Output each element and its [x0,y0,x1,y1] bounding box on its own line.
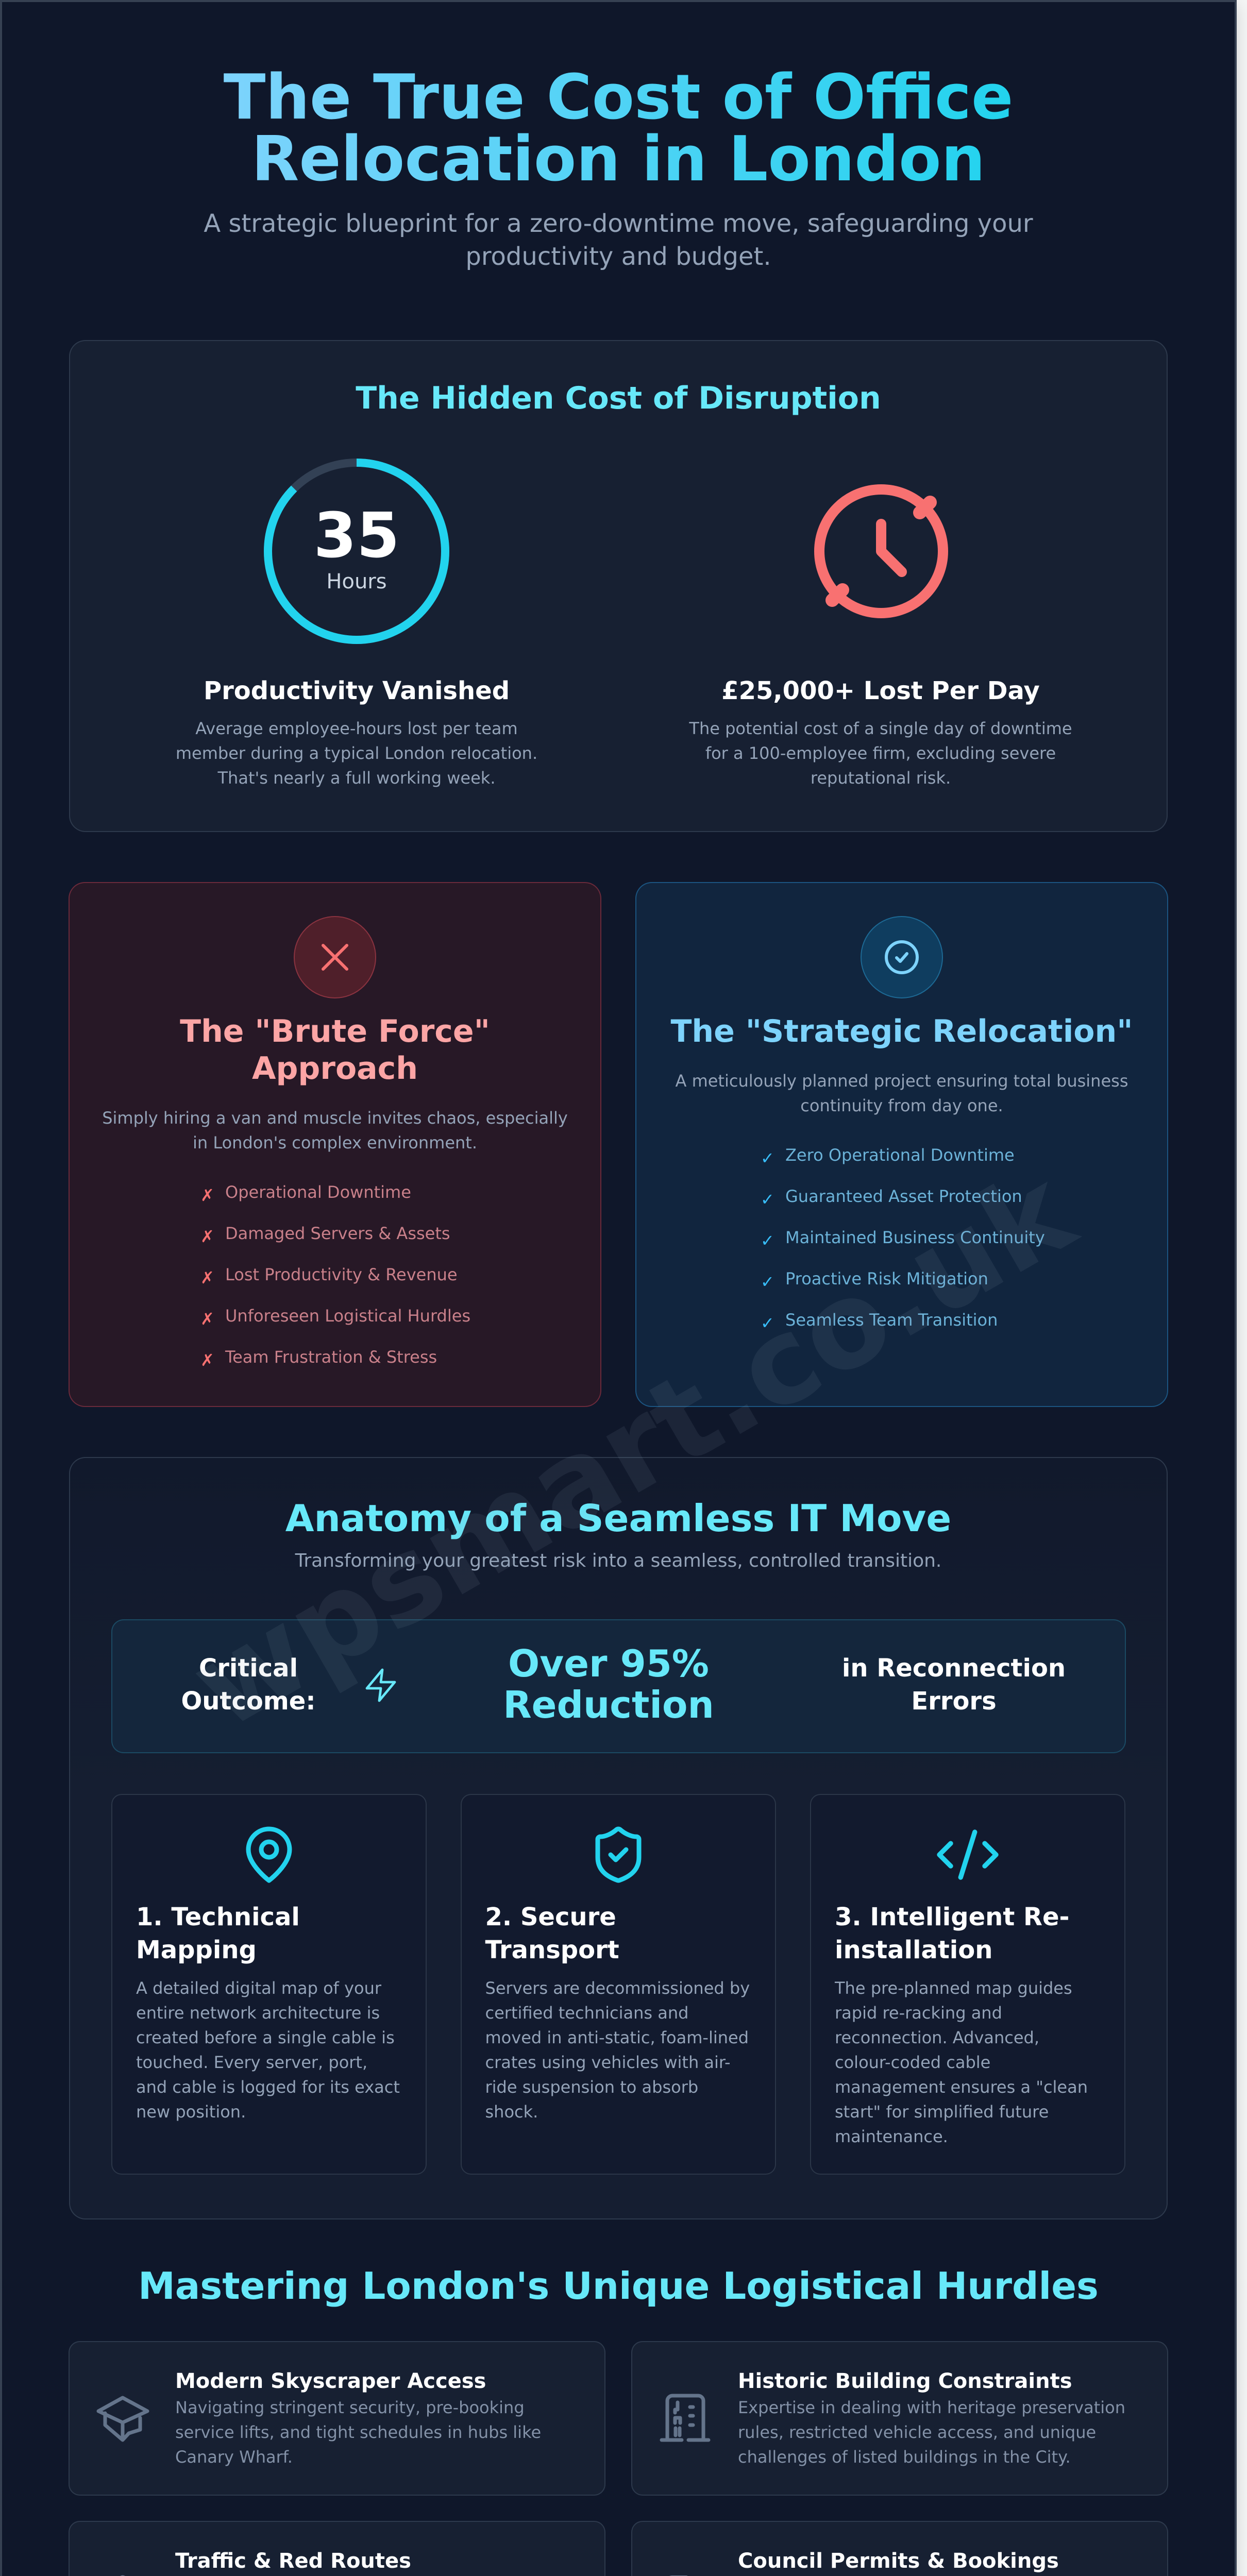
callout: critical outcome [111,1619,1126,1753]
list: strategic outcomes: Zero Operational Downtime [785,1145,1015,1165]
icon: map pin [246,1827,292,1883]
card: council permits: Council Permits & Bookings [738,2549,1059,2573]
card: intelligent re-installation: reconnection. Advanced, [835,2028,1039,2047]
callout result: Errors [911,1687,997,1716]
card: traffic and red routes: Traffic & Red Routes [175,2549,411,2573]
chart: 35 hours ring: Hours [326,570,387,594]
card: technical mapping: A detailed digital map of your [136,1978,381,1998]
icon: building [660,2394,710,2442]
description: brute force: in London's complex environment. [193,1133,477,1153]
panel: hidden cost of disruption [69,340,1168,832]
card: technical mapping: Mapping [136,1936,257,1964]
card: technical mapping [111,1794,427,2175]
list: strategic outcomes: ✓ [761,1272,774,1292]
card: historic buildings: challenges of listed buildings in the City. [738,2447,1071,2467]
stat text: productivity vanished: Average employee-hours lost per team [195,719,518,738]
chart: 35 hours ring: 35 [313,500,400,572]
icon: warning triangle [121,2575,125,2576]
subtitle: productivity and budget. [465,242,771,271]
card: intelligent re-installation: colour-coded cable [835,2053,990,2072]
card: technical mapping: new position. [136,2102,246,2122]
callout result [842,1654,1066,1716]
card: skyscraper access: Navigating stringent security, pre-booking [175,2398,525,2417]
stat text: productivity vanished: member during a typical London relocation. [176,743,537,763]
list: strategic outcomes: ✓ [761,1231,774,1250]
list: brute force outcomes: ✗ [200,1185,214,1205]
description: brute force [102,1108,568,1153]
callout label: Outcome: [181,1687,316,1716]
icon: clock [814,484,948,618]
chart: 35 hours ring [264,459,449,644]
card: historic buildings: Historic Building Constraints [738,2369,1072,2393]
icon: cross [294,916,376,998]
card: secure transport: certified technicians and [485,2003,688,2023]
heading: hidden cost: The Hidden Cost of Disruption [356,380,881,416]
card: council permits [631,2521,1168,2576]
list: brute force outcomes: Damaged Servers & Assets [225,1224,450,1243]
callout label [181,1654,316,1716]
stat text: lost per day: The potential cost of a single day of downtime [689,719,1072,738]
list: brute force outcomes: ✗ [200,1227,214,1246]
stat text: lost per day: for a 100-employee firm, excluding severe [705,743,1056,763]
list: strategic outcomes: ✓ [761,1190,774,1209]
card: technical mapping: touched. Every server, port, [136,2053,367,2072]
title [224,62,1013,195]
list: brute force outcomes: Operational Downtime [225,1182,411,1202]
title: The True Cost of Office [224,62,1013,133]
callout result: in Reconnection [842,1654,1066,1683]
card: skyscraper access: Canary Wharf. [175,2447,293,2467]
heading: brute force: The "Brute Force" [180,1013,490,1049]
icon: code [937,1829,999,1880]
heading: strategic relocation: The "Strategic Relocation" [671,1013,1133,1049]
list: brute force outcomes: ✗ [200,1268,214,1287]
list: strategic outcomes: ✓ [761,1313,774,1333]
list: strategic outcomes: Proactive Risk Mitigation [785,1269,988,1289]
card: skyscraper access: service lifts, and tight schedules in hubs like [175,2422,541,2442]
subheading: anatomy: Transforming your greatest risk into a seamless, controlled transition. [295,1550,941,1571]
list: brute force outcomes: Team Frustration & Stress [225,1347,437,1367]
card: intelligent re-installation: rapid re-racking and [835,2003,1002,2023]
list: strategic outcomes: Seamless Team Transition [785,1310,998,1330]
card: intelligent re-installation [810,1794,1125,2175]
stat title: lost per day: £25,000+ Lost Per Day [721,676,1040,705]
stat text: productivity vanished [176,719,537,788]
card: secure transport: shock. [485,2102,538,2122]
icon: shield check [596,1827,641,1883]
card: historic buildings [631,2341,1168,2496]
description: strategic relocation: continuity from day one. [800,1096,1003,1115]
card: technical mapping: 1. Technical [136,1903,300,1931]
watermark: wpsmart.co.uk [170,1143,1094,1756]
card: technical mapping: entire network architecture is [136,2003,380,2023]
callout figure [503,1642,714,1726]
panel: strategic relocation [635,882,1168,1407]
heading: brute force [180,1013,490,1087]
panel: anatomy of a seamless IT move [69,1457,1168,2219]
list: strategic outcomes: ✓ [761,1148,774,1168]
card: secure transport: ride suspension to absorb [485,2077,698,2097]
description: brute force: Simply hiring a van and muscle invites chaos, especially [102,1108,568,1128]
list: brute force outcomes [200,1182,470,1370]
card: secure transport [461,1794,776,2175]
list: brute force outcomes: ✗ [200,1350,214,1370]
list: brute force outcomes: Unforeseen Logistical Hurdles [225,1306,470,1326]
icon: box [97,2396,149,2442]
card: secure transport: Transport [485,1936,619,1964]
heading: brute force: Approach [252,1050,418,1087]
title: Relocation in London [251,124,985,195]
stat text: productivity vanished: That's nearly a full working week. [217,768,495,788]
list: strategic outcomes: Maintained Business Continuity [785,1228,1045,1247]
card: skyscraper access [69,2341,605,2496]
card: secure transport: crates using vehicles with air- [485,2053,731,2072]
list: strategic outcomes [761,1145,1045,1333]
card: skyscraper access: Modern Skyscraper Access [175,2369,486,2393]
description: strategic relocation [675,1071,1128,1115]
icon: lightning bolt [366,1668,396,1702]
card: secure transport: moved in anti-static, foam-lined [485,2028,749,2047]
card: technical mapping: created before a single cable is [136,2028,395,2047]
card: secure transport: Servers are decommissioned by [485,1978,750,1998]
stat text: lost per day: reputational risk. [811,768,951,788]
card: intelligent re-installation: 3. Intelligent Re- [835,1903,1069,1931]
list: brute force outcomes: ✗ [200,1309,214,1329]
card: secure transport: 2. Secure [485,1903,616,1931]
callout figure: Over 95% [508,1642,709,1685]
card: traffic and red routes [69,2521,605,2576]
card: intelligent re-installation: start" for simplified future [835,2102,1049,2122]
list: brute force outcomes: Lost Productivity & Revenue [225,1265,458,1284]
stat text: lost per day [689,719,1072,788]
card: historic buildings: Expertise in dealing with heritage preservation [738,2398,1125,2417]
card: intelligent re-installation: installation [835,1936,992,1964]
callout figure: Reduction [503,1683,714,1726]
icon: check circle [861,916,943,998]
description: strategic relocation: A meticulously planned project ensuring total business [675,1071,1128,1091]
subtitle: A strategic blueprint for a zero-downtime move, safeguarding your [204,209,1033,238]
panel: brute force approach [69,882,601,1407]
card: historic buildings: rules, restricted vehicle access, and unique [738,2422,1096,2442]
card: intelligent re-installation: management ensures a "clean [835,2077,1088,2097]
heading: anatomy: Anatomy of a Seamless IT Move [285,1497,951,1540]
card: technical mapping: and cable is logged for its exact [136,2077,400,2097]
stat title: productivity vanished: Productivity Vanished [204,676,510,705]
subtitle [204,209,1033,271]
list: strategic outcomes: Guaranteed Asset Protection [785,1187,1022,1206]
heading: logistical hurdles: Mastering London's Unique Logistical Hurdles [138,2264,1099,2308]
card: intelligent re-installation: The pre-planned map guides [835,1978,1072,1998]
callout label: Critical [199,1654,298,1683]
icon: document [669,2575,687,2576]
card: intelligent re-installation: maintenance. [835,2127,948,2146]
